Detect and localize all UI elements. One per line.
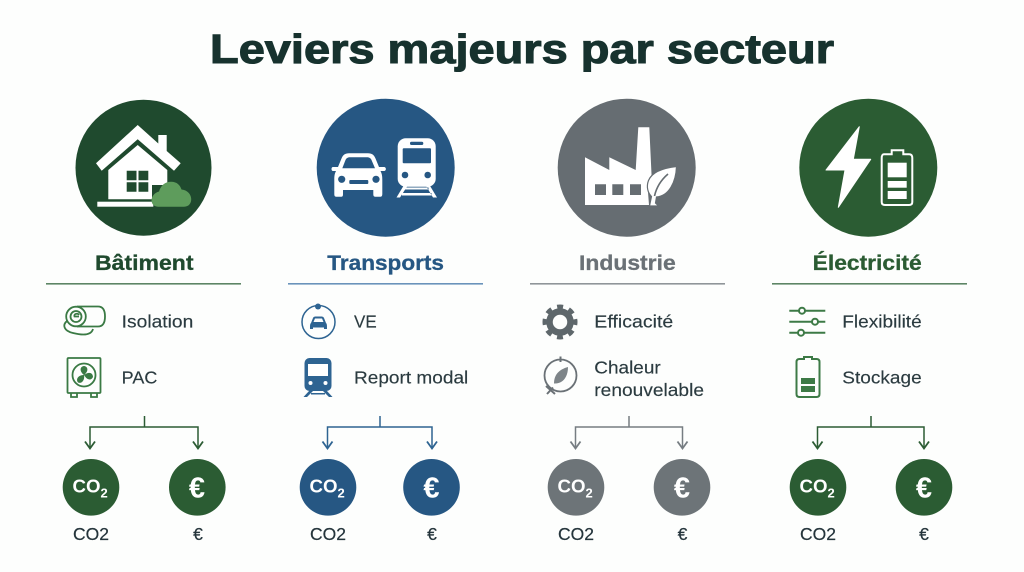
- text: Efficacité: Efficacité: [594, 311, 673, 331]
- icon: electric vehicle: [302, 304, 335, 338]
- text: Chaleur renouvelable: renouvelable: [594, 380, 704, 400]
- icon: sliders: [789, 308, 825, 336]
- icon: heat pump: [68, 358, 100, 397]
- heading: Transports: Transports: [327, 252, 444, 275]
- outcome: CO2 badge: CO: [72, 476, 100, 496]
- text: Flexibilité: Flexibilité: [842, 311, 922, 331]
- text: Isolation: Isolation: [122, 311, 193, 331]
- outcome: CO2 badge: [548, 459, 604, 516]
- panel: Transports: [288, 99, 483, 544]
- divider line: [288, 283, 483, 285]
- text: VE: VE: [354, 311, 377, 331]
- text: PAC: PAC: [122, 367, 157, 387]
- outcome: euro badge: €: [423, 472, 440, 504]
- text: Chaleur renouvelable: Chaleur: [594, 357, 661, 377]
- arrows: branch to outcomes: [85, 416, 203, 448]
- outcome: euro badge: [169, 459, 226, 516]
- divider line: [46, 283, 241, 285]
- heading: Industrie: Industrie: [579, 252, 676, 275]
- icon: insulation roll: [64, 306, 105, 334]
- panel: Industrie: [530, 99, 725, 544]
- outcome: CO2 badge: CO: [310, 476, 338, 496]
- icon: gear: [545, 307, 575, 337]
- arrows: branch to outcomes: [570, 416, 688, 448]
- text: Stockage: Stockage: [842, 367, 922, 387]
- divider line: [530, 283, 725, 285]
- label: euro: €: [193, 524, 203, 544]
- text: Report modal: Report modal: [354, 367, 468, 387]
- label: CO2: CO2: [558, 524, 594, 544]
- outcome: CO2 badge: [63, 459, 119, 516]
- outcome: CO2 badge: CO: [558, 476, 586, 496]
- outcome: euro badge: [896, 459, 952, 516]
- heading: Bâtiment: Bâtiment: [95, 252, 194, 275]
- label: euro: €: [427, 524, 437, 544]
- arrows: branch to outcomes: [812, 416, 929, 448]
- label: euro: €: [919, 524, 929, 544]
- outcome: CO2 badge: [300, 459, 356, 516]
- icon: battery: [796, 357, 820, 397]
- icon: train: [304, 358, 332, 397]
- outcome: CO2 badge: 2: [100, 486, 108, 500]
- panel: Électricité: [772, 99, 967, 544]
- outcome: CO2 badge: [790, 459, 846, 516]
- icon: house in dark green circle: [76, 100, 212, 236]
- outcome: euro badge: [654, 459, 710, 516]
- label: CO2: CO2: [800, 524, 836, 544]
- icon: car and train in blue circle: [317, 99, 455, 237]
- arrows: branch to outcomes: [322, 416, 437, 448]
- label: euro: €: [678, 524, 688, 544]
- outcome: CO2 badge: 2: [586, 486, 593, 500]
- label: CO2: CO2: [73, 524, 109, 544]
- outcome: CO2 badge: CO: [800, 476, 828, 496]
- outcome: CO2 badge: 2: [338, 486, 345, 500]
- icon: circular renewable heat: [544, 356, 576, 394]
- outcome: euro badge: €: [674, 472, 690, 504]
- icon: factory and leaf in grey circle: [558, 99, 696, 237]
- divider line: [772, 283, 967, 285]
- label: CO2: CO2: [310, 524, 346, 544]
- outcome: euro badge: €: [189, 472, 205, 504]
- text: Chaleur renouvelable: [594, 357, 704, 400]
- outcome: euro badge: €: [916, 472, 932, 504]
- outcome: euro badge: [403, 459, 460, 516]
- title: Leviers majeurs par secteur: [210, 26, 834, 72]
- panel: Bâtiment: [46, 100, 241, 544]
- heading: Électricité: Électricité: [813, 252, 922, 275]
- outcome: CO2 badge: 2: [828, 486, 835, 500]
- icon: lightning and battery in green circle: [799, 99, 937, 237]
